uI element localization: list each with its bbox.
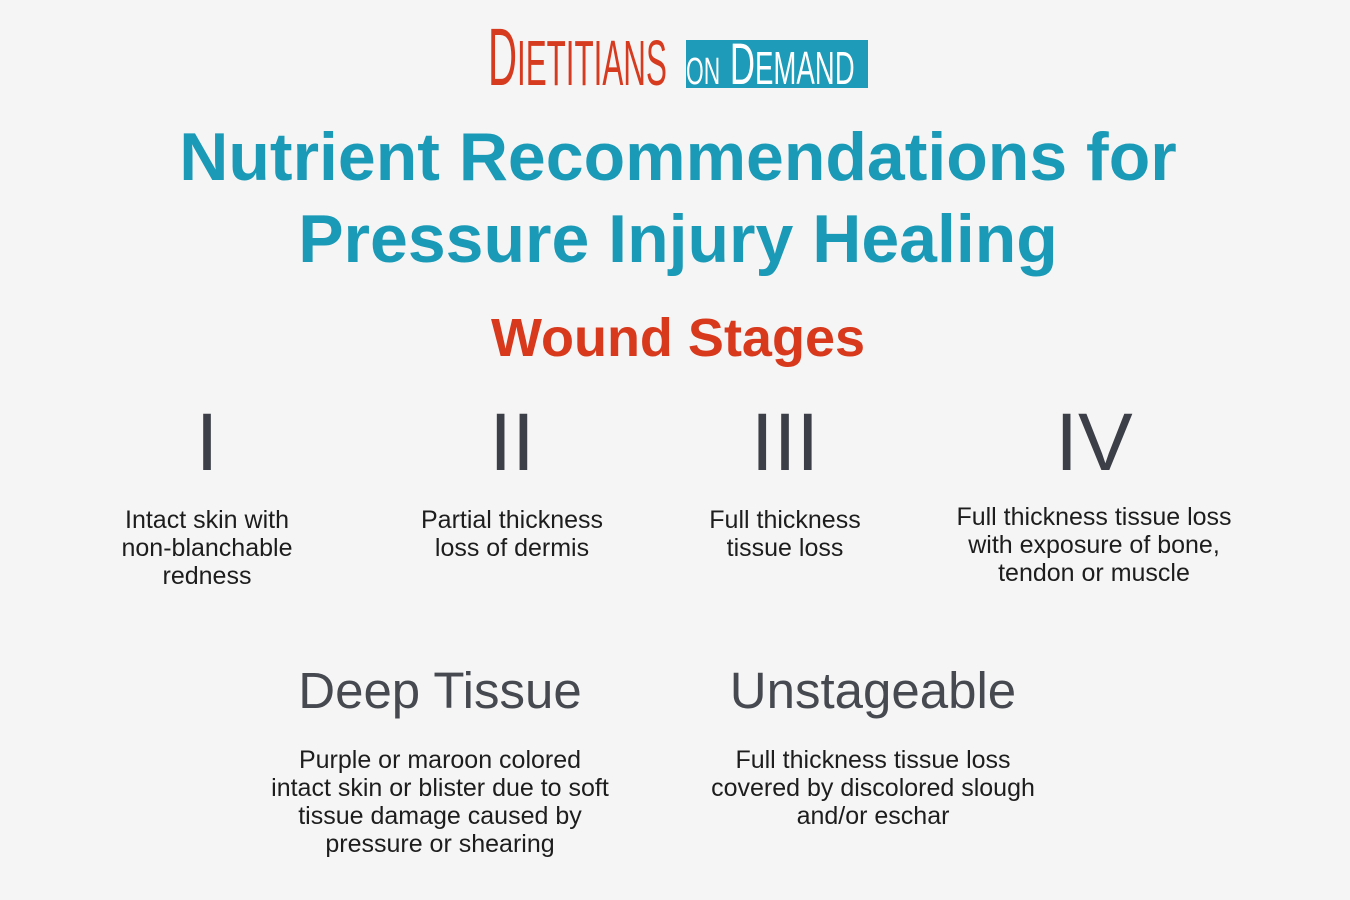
stage II: II	[489, 397, 535, 488]
stage III	[709, 397, 861, 562]
stage I: Intact skin with	[125, 506, 289, 534]
deep tissue	[271, 662, 609, 858]
unstageable: Unstageable	[730, 662, 1016, 719]
stage I: non-blanchable	[122, 534, 292, 562]
stage IV: IV	[1055, 397, 1133, 488]
unstageable: and/or eschar	[797, 802, 949, 830]
deep tissue: tissue damage caused by	[298, 802, 582, 830]
title: Pressure Injury Healing	[298, 201, 1058, 277]
stage I: redness	[163, 562, 251, 590]
deep tissue: Purple or maroon colored	[299, 746, 581, 774]
stage II: loss of dermis	[435, 534, 589, 562]
title: Nutrient Recommendations for	[179, 119, 1177, 195]
stage IV: Full thickness tissue loss	[956, 503, 1232, 531]
subtitle: Wound Stages	[491, 308, 865, 368]
deep tissue: pressure or shearing	[325, 830, 555, 858]
stage II: Partial thickness	[421, 506, 603, 534]
stage IV: with exposure of bone,	[968, 531, 1220, 559]
stage III: III	[751, 397, 819, 488]
stage IV	[956, 397, 1232, 587]
deep tissue: Deep Tissue	[298, 662, 582, 719]
stage II	[421, 397, 603, 562]
stage I: I	[196, 397, 218, 488]
stage III: tissue loss	[727, 534, 843, 562]
stage III: Full thickness	[709, 506, 861, 534]
logo: dietitians: DIETITIANS	[488, 12, 667, 103]
stage IV: tendon or muscle	[998, 559, 1190, 587]
title	[179, 119, 1177, 277]
deep tissue: intact skin or blister due to soft	[271, 774, 609, 802]
stage I	[122, 397, 292, 590]
unstageable	[711, 662, 1035, 830]
unstageable: Full thickness tissue loss	[735, 746, 1011, 774]
unstageable: covered by discolored slough	[711, 774, 1035, 802]
logo	[488, 12, 868, 103]
